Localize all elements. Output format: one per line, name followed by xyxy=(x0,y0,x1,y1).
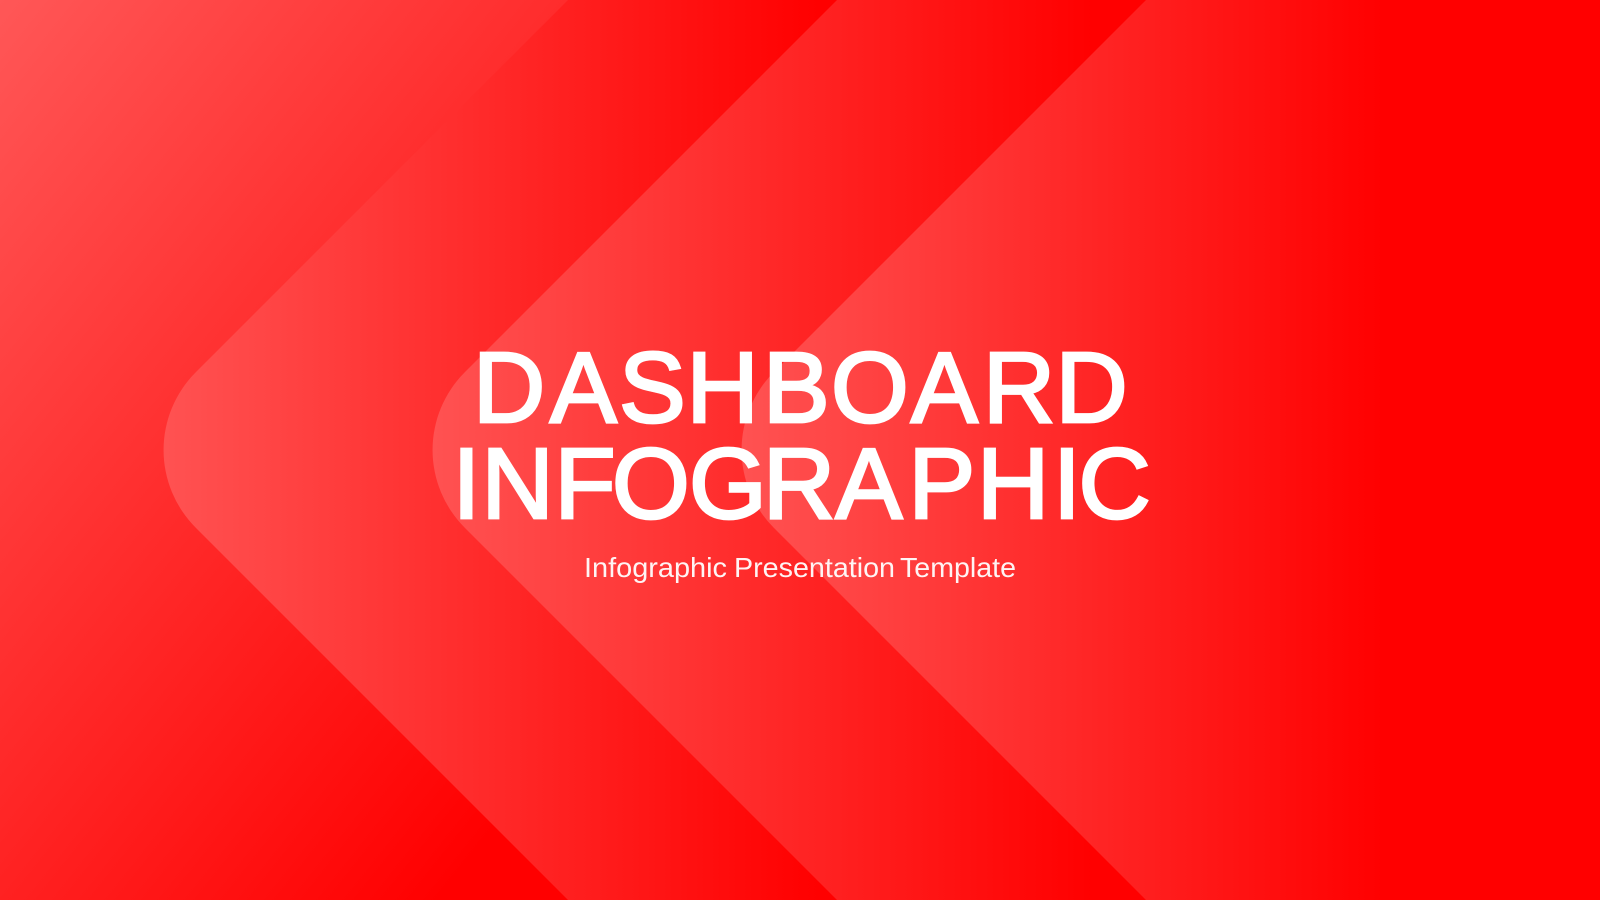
subtitle xyxy=(584,552,1016,583)
chevron shape 3 xyxy=(742,0,1600,900)
title xyxy=(452,332,1151,540)
subtitle: Template xyxy=(900,552,1016,583)
subtitle: Presentation xyxy=(734,552,895,583)
subtitle: Infographic xyxy=(584,552,727,583)
chevron shape 2 xyxy=(433,0,1600,900)
title: INFOGRAPHIC xyxy=(452,428,1151,540)
title: DASHBOARD xyxy=(473,332,1128,444)
